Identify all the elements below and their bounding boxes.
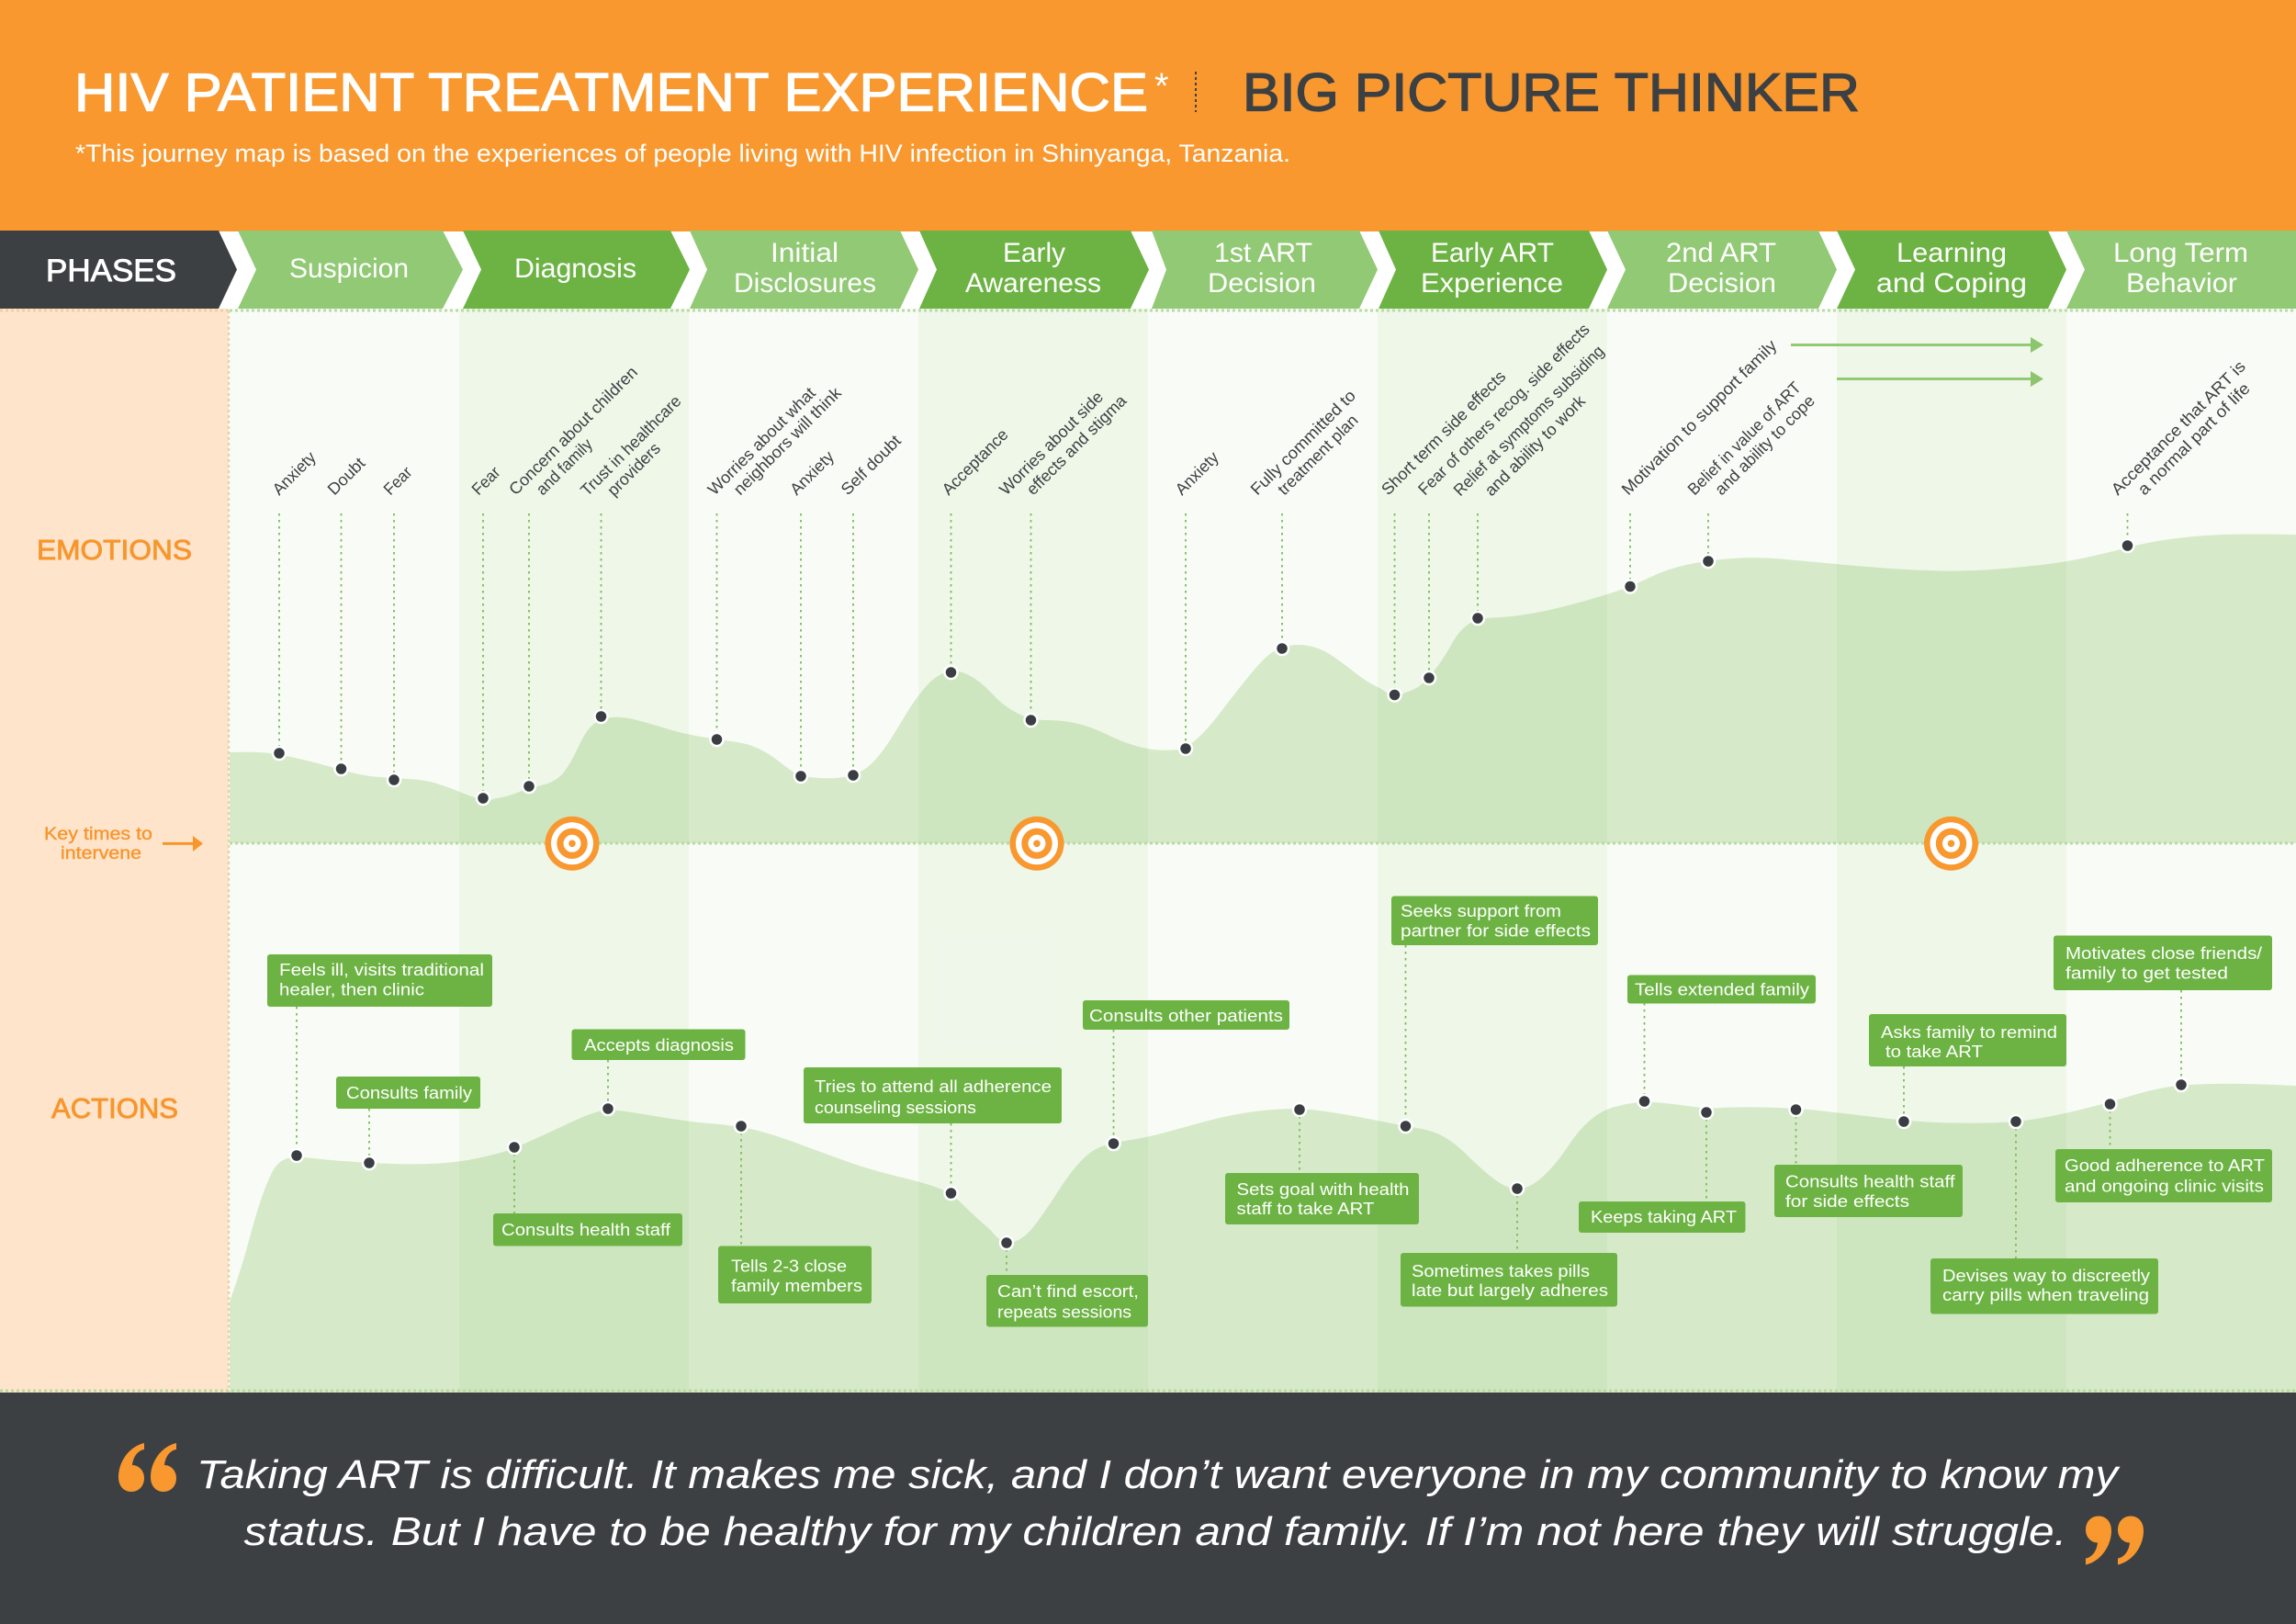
panel: quote footer: [0, 1393, 2296, 1624]
panel: chart background: [230, 309, 2296, 1393]
phase: learning and coping: and Coping: [1876, 268, 2027, 299]
icon: intervention target: [546, 817, 599, 871]
emotion: trust in providers: Trust in healthcare: [577, 391, 685, 500]
emotion: trust in providers: providers: [603, 439, 664, 500]
key times label: [44, 825, 152, 863]
emotion: belief in value of ART: Belief in value of ART: [1684, 378, 1805, 499]
action: sets goal: staff to take ART: [1236, 1200, 1374, 1218]
quote text: Taking ART is difficult. It makes me sick, and I don’t want everyone in my community to know my: [197, 1452, 2121, 1497]
action: good adherence: Good adherence to ART: [2065, 1156, 2265, 1175]
action: sets goal: [1225, 1103, 1419, 1224]
phase: suspicion: [238, 231, 463, 309]
action: cannot find escort: repeats sessions: [997, 1303, 1131, 1321]
emotion: motivation to support family: Motivation to support family: [1618, 336, 1780, 499]
action: devises way to carry pills: [1930, 1115, 2158, 1314]
action: consults family: [336, 1077, 480, 1169]
emotion: anxiety: [269, 448, 320, 760]
panel: side column: [0, 309, 229, 1393]
action: consults other patients: Consults other patients: [1089, 1007, 1283, 1025]
action: consults other patients: [1083, 1000, 1289, 1150]
phase: label: PHASES: [46, 254, 176, 288]
action: sometimes takes pills late: Sometimes takes pills: [1412, 1262, 1590, 1280]
key times label: Key times to: [44, 825, 152, 844]
emotion: fear: Fear: [468, 463, 504, 499]
emotion: anxiety: Anxiety: [1172, 448, 1222, 499]
emotion: fully committed: treatment plan: [1274, 411, 1362, 499]
action: asks family to remind: to take ART: [1885, 1043, 1983, 1061]
action: tries to attend: Tries to attend all adherence: [815, 1077, 1052, 1096]
icon: intervention target: [1010, 817, 1064, 871]
action: consults family: Consults family: [346, 1084, 472, 1102]
emotion: worries about neighbors: neighbors will think: [730, 383, 846, 499]
emotion: worries about side effects: [996, 388, 1131, 727]
emotion: short term side effects: [1378, 367, 1509, 702]
phase: early awareness: Awareness: [965, 268, 1101, 299]
emotion: anxiety: Anxiety: [786, 447, 838, 499]
action: tells extended family: Tells extended family: [1635, 981, 1809, 999]
action: keeps taking ART: [1579, 1106, 1745, 1233]
actions heading: ACTIONS: [51, 1092, 178, 1124]
phase: 1st ART decision: Decision: [1208, 268, 1316, 299]
icon: closing quote mark: [2086, 1516, 2144, 1565]
phase: early awareness: [919, 231, 1149, 309]
phase: learning and coping: [1837, 231, 2066, 309]
emotion: belief in value of ART: [1684, 378, 1818, 568]
phase: early ART experience: Early ART: [1431, 238, 1554, 268]
action: tells family members: [718, 1120, 872, 1303]
emotion: worries about side effects: effects and stigma: [1023, 390, 1131, 499]
phase: 2nd ART decision: 2nd ART: [1666, 238, 1776, 268]
phase: initial disclosures: Disclosures: [734, 268, 876, 299]
action: consults health staff: Consults health staff: [501, 1221, 671, 1239]
action: consults staff for side effects: for side effects: [1785, 1192, 1909, 1211]
action: sometimes takes pills late: [1401, 1182, 1617, 1306]
action: good adherence: [2055, 1098, 2272, 1202]
panel: actions markers: [267, 897, 2272, 1326]
chart: actions curve: [230, 1084, 2296, 1393]
emotion: acceptance of ART: Acceptance that ART is: [2108, 357, 2249, 499]
title: HIV PATIENT TREATMENT EXPERIENCE: [74, 62, 1148, 123]
action: sets goal: Sets goal with health: [1236, 1180, 1409, 1199]
phase: 1st ART decision: [1152, 231, 1378, 309]
emotion: fear of others: Fear of others recog. side effects: [1414, 320, 1593, 499]
emotion: belief in value of ART: and ability to cope: [1711, 391, 1818, 499]
emotion: concern about children: and family: [533, 435, 596, 499]
action: seeks support: partner for side effects: [1401, 922, 1591, 941]
action: cannot find escort: [986, 1236, 1148, 1326]
emotion: concern about children: Concern about children: [505, 363, 641, 499]
action: devises way to carry pills: carry pills when traveling: [1942, 1286, 2149, 1304]
emotion: acceptance of ART: [2108, 357, 2254, 552]
emotion: acceptance: Acceptance: [939, 425, 1012, 499]
arrow: motivation continues: [1791, 337, 2043, 353]
emotion: worries about side effects: Worries about side: [996, 388, 1107, 499]
emotion: worries about neighbors: Worries about what: [704, 384, 819, 499]
action: keeps taking ART: Keeps taking ART: [1591, 1208, 1737, 1226]
phase: learning and coping: Learning: [1896, 238, 2007, 268]
emotion: concern about children: [505, 363, 641, 793]
quote text: [197, 1452, 2121, 1554]
phase: 2nd ART decision: Decision: [1668, 268, 1776, 299]
phase: 2nd ART decision: [1607, 231, 1837, 309]
emotion: fully committed: [1247, 386, 1362, 655]
action: tries to attend: counseling sessions: [815, 1099, 976, 1117]
phase: early awareness: Early: [1003, 238, 1065, 268]
emotion: anxiety: [1172, 448, 1222, 755]
phase: early ART experience: Experience: [1421, 268, 1563, 299]
emotion: fear: [380, 463, 416, 786]
action: tells family members: Tells 2-3 close: [731, 1257, 847, 1275]
action: devises way to carry pills: Devises way to discreetly: [1942, 1267, 2150, 1285]
icon: intervention target: [1924, 817, 1978, 871]
action: seeks support: [1391, 897, 1598, 1133]
emotion: fear: [468, 463, 504, 805]
panel: emotions markers: [269, 320, 2254, 805]
action: motivates friends: Motivates close friends/: [2065, 944, 2262, 963]
phase: initial disclosures: Initial: [771, 238, 838, 268]
action: cannot find escort: Can’t find escort,: [997, 1282, 1139, 1301]
emotion: acceptance: [939, 425, 1012, 679]
phase: suspicion: Suspicion: [289, 254, 409, 284]
emotion: worries about neighbors: [704, 383, 846, 746]
action: accepts diagnosis: [571, 1029, 746, 1115]
title asterisk: *: [1154, 66, 1169, 107]
action: accepts diagnosis: Accepts diagnosis: [584, 1036, 734, 1054]
emotion: relief at symptoms subsiding: [1450, 342, 1608, 625]
key times label: intervene: [61, 844, 141, 863]
emotion: relief at symptoms subsiding: Relief at symptoms subsiding: [1450, 342, 1608, 500]
header band: [0, 0, 2296, 231]
action: consults staff for side effects: [1774, 1103, 1963, 1217]
persona title: BIG PICTURE THINKER: [1243, 62, 1860, 123]
phase: diagnosis: [463, 231, 690, 309]
action: motivates friends: family to get tested: [2065, 964, 2228, 983]
phase: long term behavior: Long Term: [2113, 238, 2248, 268]
emotion: doubt: [324, 454, 368, 775]
emotion: relief at symptoms subsiding: and ability to work: [1481, 391, 1590, 500]
phase: label: [0, 231, 237, 309]
emotions heading: EMOTIONS: [37, 534, 192, 566]
emotion: acceptance of ART: a normal part of life: [2134, 379, 2254, 499]
emotion: fully committed: Fully committed to: [1247, 386, 1359, 499]
phase: early ART experience: [1379, 231, 1607, 309]
action: asks family to remind: Asks family to remind: [1881, 1023, 2057, 1042]
arrow: belief continues: [1837, 371, 2043, 387]
action: feels ill: Feels ill, visits traditional: [279, 961, 484, 979]
chart: emotions curve: [230, 535, 2296, 843]
phase: initial disclosures: [690, 231, 918, 309]
action: tells family members: family members: [731, 1277, 862, 1295]
action: motivates friends: [2054, 935, 2272, 1091]
quote text: status. But I have to be healthy for my children and family. If I’m not here they will struggle.: [244, 1509, 2066, 1554]
emotion: anxiety: Anxiety: [269, 448, 320, 499]
action: feels ill: healer, then clinic: [279, 981, 424, 999]
emotion: trust in providers: [577, 391, 685, 723]
action: tells extended family: [1627, 976, 1816, 1108]
phase: diagnosis: Diagnosis: [514, 254, 636, 284]
action: consults health staff: [493, 1141, 682, 1246]
action: asks family to remind: [1869, 1014, 2066, 1128]
emotion: doubt: Doubt: [324, 454, 368, 499]
action: sometimes takes pills late: late but largely adheres: [1412, 1281, 1608, 1300]
phase: long term behavior: [2066, 231, 2296, 309]
action: feels ill: [267, 954, 492, 1162]
emotion: self doubt: Self doubt: [838, 432, 905, 499]
phases bar: [0, 231, 2296, 309]
emotion: anxiety: [786, 447, 838, 783]
emotion: fear of others: [1414, 320, 1593, 684]
action: tries to attend: [804, 1067, 1062, 1200]
arrow: key times: [163, 842, 195, 845]
action: consults staff for side effects: Consults health staff: [1785, 1172, 1956, 1190]
icon: opening quote mark: [118, 1443, 176, 1492]
phase: 1st ART decision: 1st ART: [1214, 238, 1312, 268]
subtitle note: *This journey map is based on the experiences of people living with HIV infection in Shinyanga, Tanzania.: [75, 140, 1290, 167]
emotion: fear: Fear: [380, 463, 416, 499]
emotion: motivation to support family: [1618, 336, 1780, 593]
action: seeks support: Seeks support from: [1401, 902, 1561, 920]
phase: long term behavior: Behavior: [2126, 268, 2237, 299]
action: good adherence: and ongoing clinic visits: [2065, 1178, 2264, 1196]
emotion: short term side effects: Short term side effects: [1378, 367, 1509, 499]
emotion: self doubt: [838, 432, 905, 782]
